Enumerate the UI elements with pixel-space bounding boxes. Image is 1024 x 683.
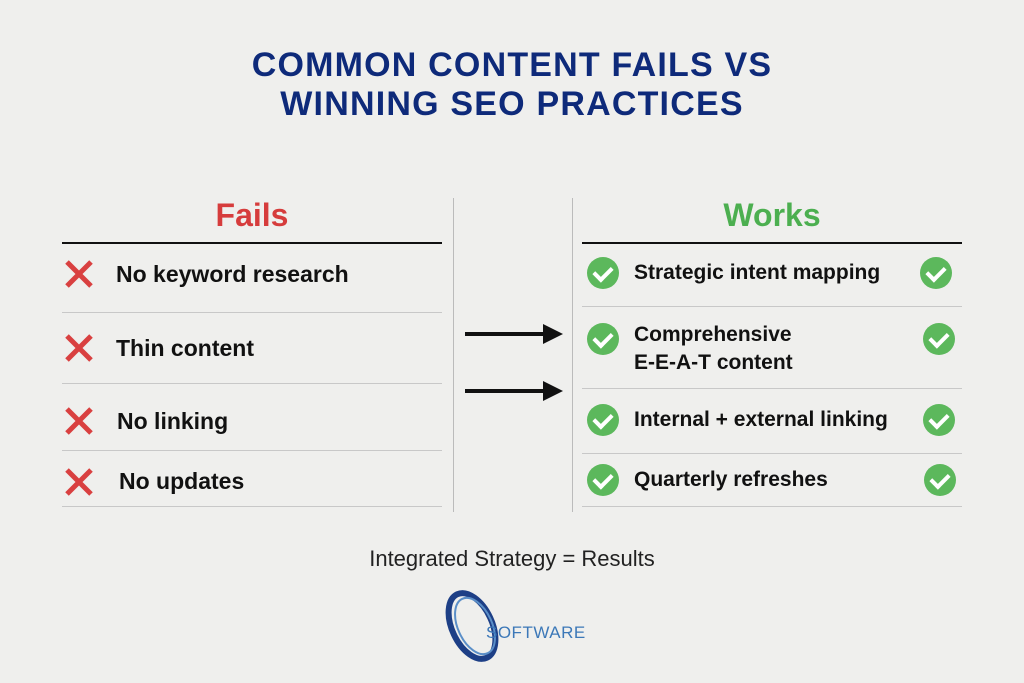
row 3: Internal + external linking (634, 408, 888, 431)
divider lines (453, 198, 454, 512)
arrows (465, 324, 563, 401)
row 1: No keyword research (116, 261, 349, 287)
row 4 (587, 464, 956, 496)
row 2: Thin content (116, 335, 254, 361)
logo: SOFTWARE (486, 623, 586, 642)
row 1: Strategic intent mapping (634, 261, 880, 284)
panel: works (582, 197, 962, 507)
row 2 (65, 334, 254, 362)
title: COMMON CONTENT FAILS VS (252, 46, 772, 84)
row 2: Comprehensive (634, 323, 792, 346)
footer text: Integrated Strategy = Results (369, 546, 655, 571)
title (252, 46, 772, 123)
row 2 (587, 323, 955, 374)
row 3 (65, 407, 228, 435)
row 4: Quarterly refreshes (634, 468, 828, 491)
logo (446, 590, 586, 662)
row 4: No updates (119, 468, 244, 494)
row 4 (65, 468, 244, 496)
heading: works: Works (723, 197, 821, 233)
row 3: No linking (117, 408, 228, 434)
row 1 (587, 257, 952, 289)
row 2: E-E-A-T content (634, 351, 793, 374)
heading: fails: Fails (216, 197, 288, 233)
title: WINNING SEO PRACTICES (280, 85, 744, 123)
panel: fails (62, 197, 442, 507)
row 3 (587, 404, 955, 436)
